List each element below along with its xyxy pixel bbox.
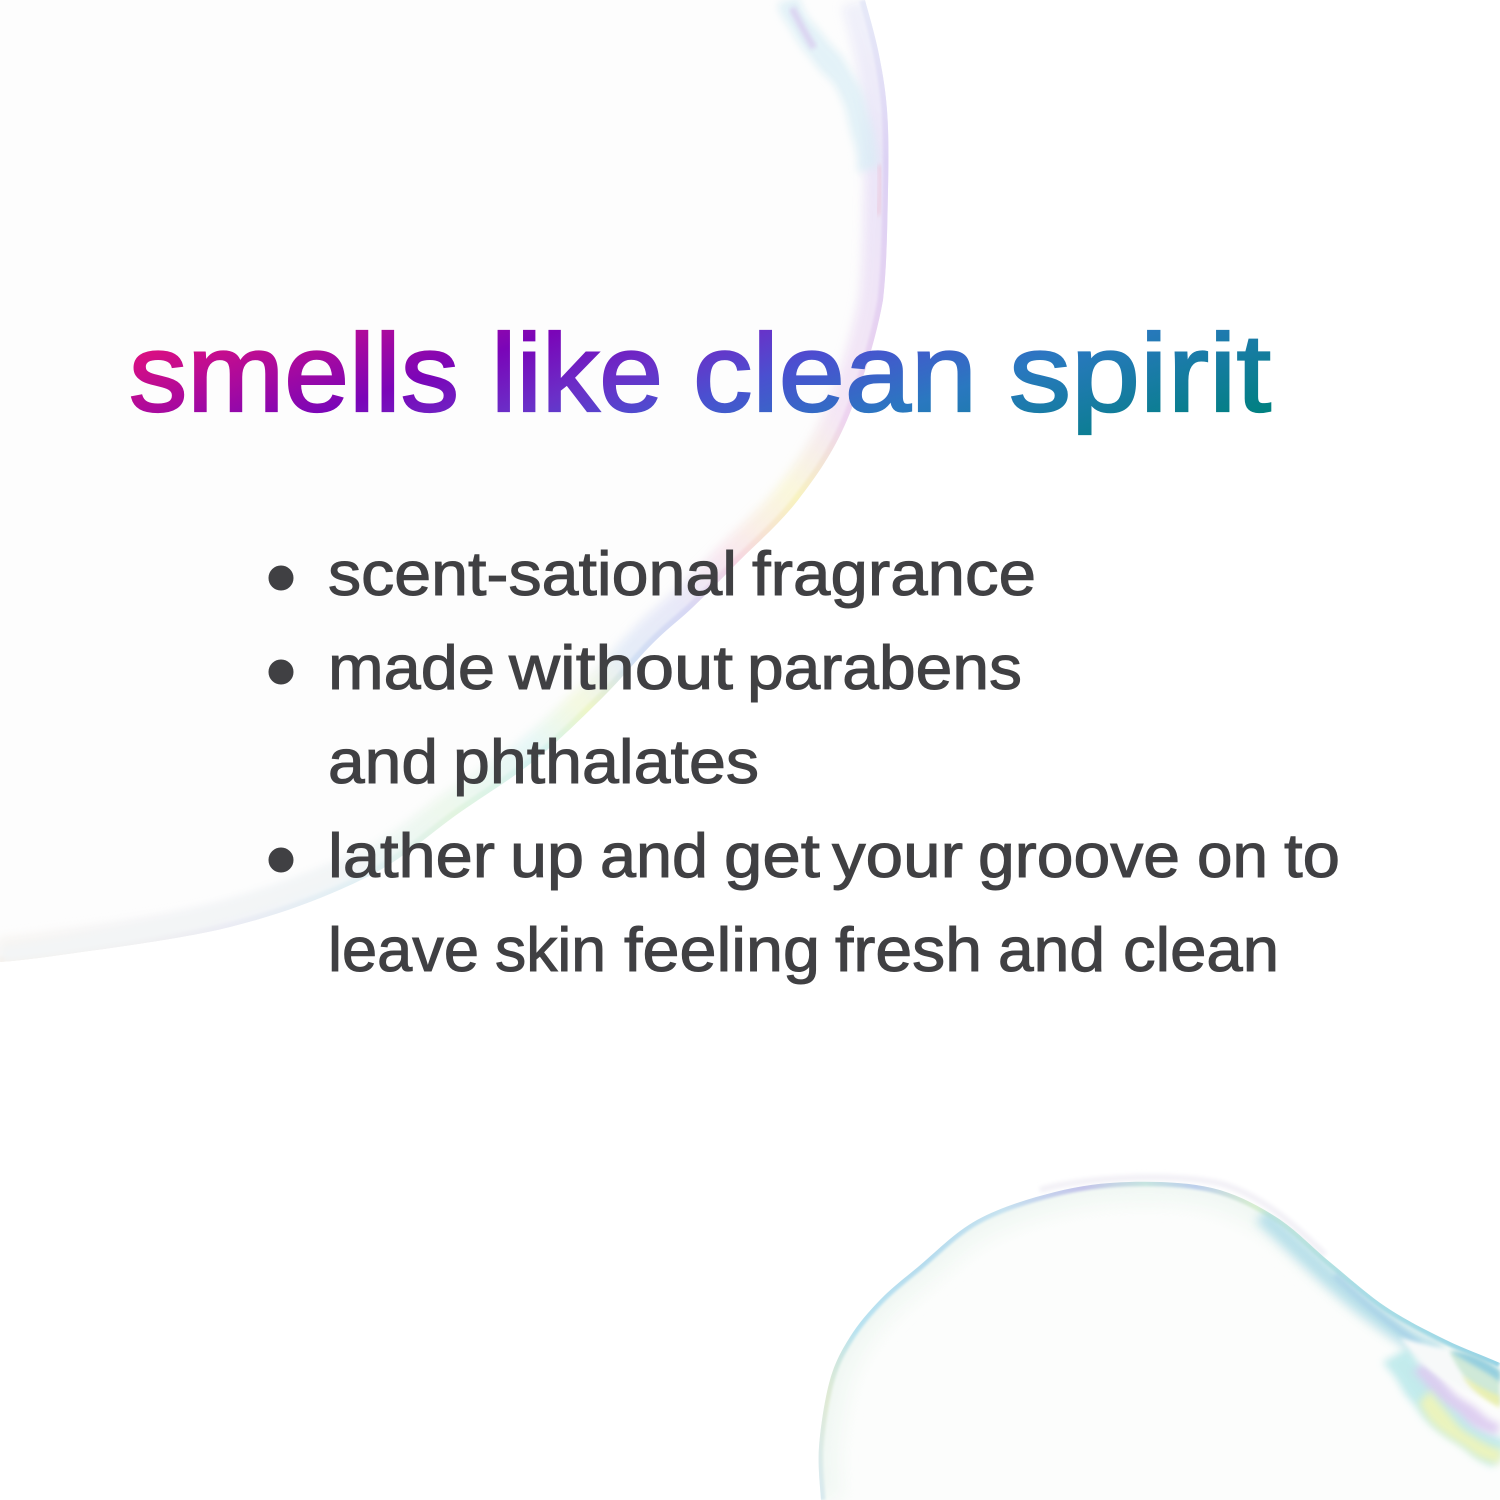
bullet item: fragrance bbox=[269, 540, 1036, 609]
bullet item: lather bbox=[269, 822, 1340, 985]
bullet list bbox=[269, 540, 1340, 985]
bullet item: lather: groove bbox=[978, 822, 1180, 891]
bubble: small bottom right bbox=[819, 1177, 1500, 1500]
title: spirit bbox=[1009, 312, 1271, 435]
bullet item: lather: skin bbox=[495, 916, 606, 985]
bullet item: lather: feeling bbox=[624, 916, 820, 985]
bullet item: lather: fresh bbox=[835, 916, 982, 985]
title: smells bbox=[129, 312, 459, 435]
bullet item: lather: to bbox=[1284, 822, 1340, 891]
bullet item: lather: and bbox=[998, 916, 1105, 985]
bullet item: lather: on bbox=[1197, 822, 1268, 891]
title: like bbox=[491, 312, 663, 435]
bullet item: fragrance: fragrance bbox=[752, 540, 1036, 609]
bullet item: without parabens: made bbox=[328, 634, 495, 703]
bullet item: lather: and bbox=[600, 822, 708, 891]
bullet item: lather: lather bbox=[328, 822, 495, 891]
bullet item: lather: get bbox=[724, 822, 820, 891]
bubble: large top left bbox=[0, 0, 888, 962]
bullet item: without parabens bbox=[269, 634, 1022, 797]
bullet item: without parabens: phthalates bbox=[453, 728, 759, 797]
bullet item: without parabens: and bbox=[328, 728, 438, 797]
bullet item: lather: your bbox=[832, 822, 963, 891]
bullet item: without parabens: parabens bbox=[747, 634, 1022, 703]
bullet item: fragrance: scent-sational bbox=[328, 540, 737, 609]
bullet item: lather: leave bbox=[328, 916, 479, 985]
bullet item: lather: clean bbox=[1123, 916, 1279, 985]
bullet item: without parabens: without bbox=[508, 634, 733, 703]
bullet item: lather: up bbox=[510, 822, 584, 891]
title: clean bbox=[693, 312, 977, 435]
